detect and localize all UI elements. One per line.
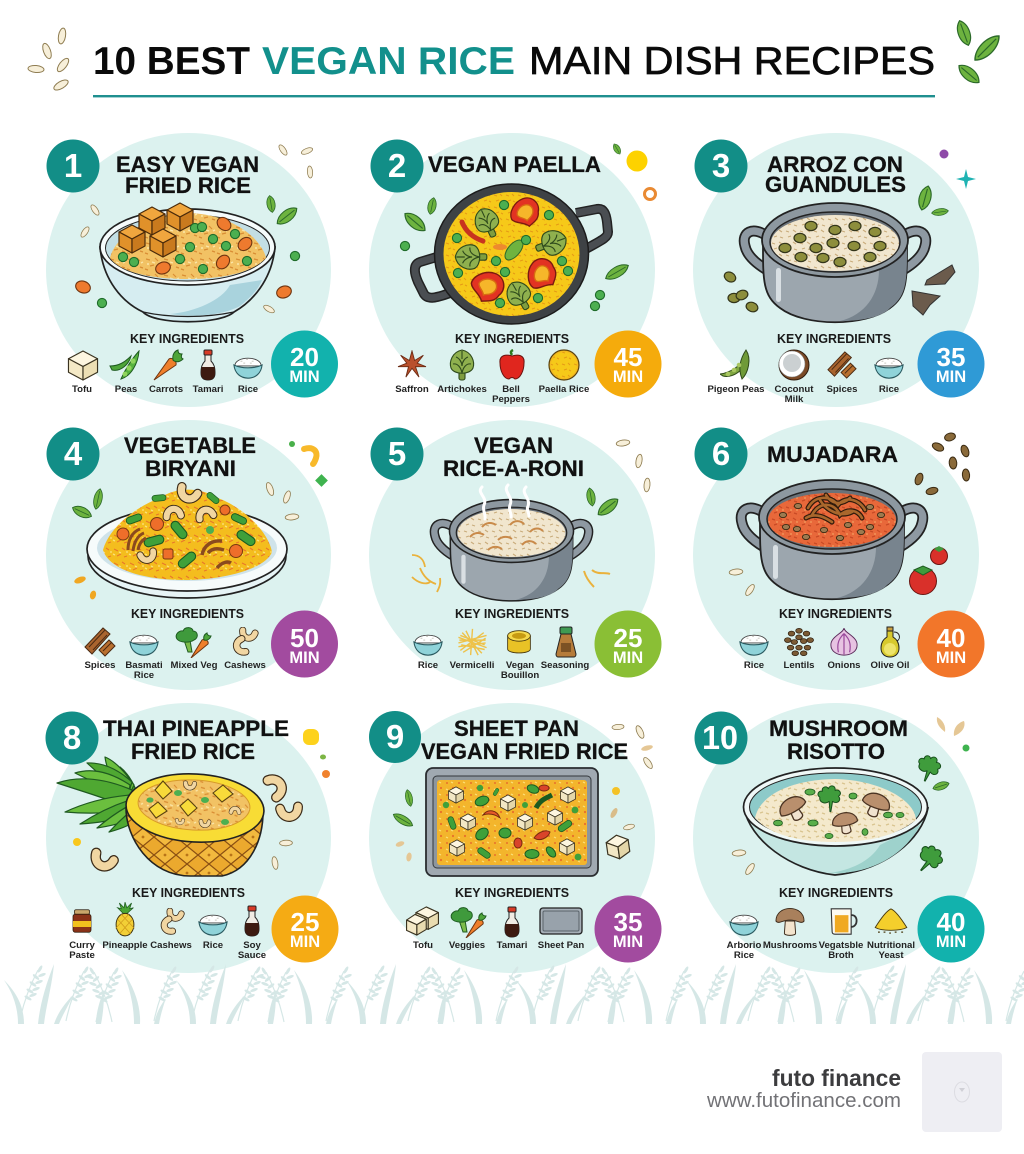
footer brand text: www.futofinance.com bbox=[706, 1090, 901, 1112]
ingredient: Bell Peppers: Peppers bbox=[492, 394, 530, 405]
ingredient: Spices bbox=[85, 628, 115, 671]
ingredient: Rice bbox=[234, 358, 262, 395]
time badge 40 min bbox=[918, 896, 984, 962]
time badge 25 min: MIN bbox=[613, 649, 643, 667]
key ingredients label: KEY INGREDIENTS bbox=[132, 886, 245, 900]
heading: FRIED RICE bbox=[131, 739, 255, 764]
time badge 45 min bbox=[594, 330, 662, 398]
key ingredients label: KEY INGREDIENTS bbox=[779, 607, 892, 621]
illustration: steaming pot bbox=[434, 485, 589, 601]
ingredient: Pineapple bbox=[102, 902, 148, 951]
number badge 9: 9 bbox=[386, 718, 404, 755]
decorative ingredients bbox=[400, 142, 656, 311]
ingredient: Rice bbox=[199, 915, 227, 951]
ingredient: Pigeon Peas bbox=[707, 350, 765, 395]
ingredient: Rice bbox=[414, 635, 442, 671]
ingredient: Coconut Milk bbox=[775, 350, 814, 405]
decorative ingredients bbox=[723, 150, 976, 315]
ingredient: Vermicelli bbox=[450, 629, 494, 671]
ingredient: Tofu bbox=[68, 351, 98, 395]
illustration: bowl of fried rice bbox=[100, 203, 275, 322]
ingredient: Vegan Bouillon bbox=[501, 631, 539, 681]
time badge 40 min bbox=[918, 610, 984, 678]
time badge 40 min: MIN bbox=[936, 933, 966, 951]
ingredient: Onions bbox=[827, 628, 861, 671]
time badge 45 min: MIN bbox=[613, 368, 643, 386]
time badge 20 min bbox=[271, 330, 338, 398]
ingredient: Soy Sauce: Soy bbox=[243, 940, 261, 951]
panel: 2 Vegan Paella bbox=[369, 133, 662, 407]
panel: 1 Easy Vegan Fried Rice bbox=[46, 133, 338, 407]
key ingredients label: KEY INGREDIENTS bbox=[131, 607, 244, 621]
decorative ingredients bbox=[71, 441, 328, 600]
panel: 8 Thai Pineapple Fried Rice bbox=[46, 703, 338, 973]
icon: rice grains top left bbox=[28, 28, 71, 92]
ingredient: Coconut Milk: Milk bbox=[785, 394, 804, 405]
time badge 45 min: 45 bbox=[614, 342, 642, 372]
title: VEGAN RICE bbox=[262, 40, 515, 83]
number badge 3 bbox=[694, 140, 748, 192]
ingredient: Mixed Veg: Mixed Veg bbox=[171, 660, 218, 671]
heading: SHEET PAN bbox=[454, 716, 579, 741]
ingredient: Cashews: Cashews bbox=[224, 660, 266, 671]
heading bbox=[769, 716, 908, 764]
time badge 35 min: 35 bbox=[614, 907, 642, 937]
ingredient: Olive Oil: Olive Oil bbox=[871, 660, 909, 671]
ingredient: Nutritional Yeast: Nutritional bbox=[867, 940, 915, 951]
ingredient: Tofu: Tofu bbox=[72, 384, 92, 395]
decorative ingredients bbox=[74, 144, 314, 314]
ingredient: Basmati Rice: Basmati bbox=[125, 660, 163, 671]
time badge 35 min: MIN bbox=[936, 368, 966, 386]
number badge 5: 5 bbox=[388, 435, 406, 472]
ingredient: Mushrooms: Mushrooms bbox=[763, 940, 817, 951]
ingredient: Onions: Onions bbox=[827, 660, 861, 671]
ingredient: Rice bbox=[740, 635, 768, 671]
ingredient: Spices bbox=[827, 352, 857, 395]
footer brand text bbox=[706, 1065, 901, 1112]
time badge 35 min bbox=[594, 896, 662, 962]
ingredient: Seasoning bbox=[541, 627, 589, 671]
ingredient: Soy Sauce: Sauce bbox=[238, 950, 266, 961]
ingredient: Tamari: Tamari bbox=[497, 940, 527, 951]
ingredient: Mixed Veg bbox=[171, 628, 218, 671]
footer brand text: futo finance bbox=[772, 1065, 901, 1091]
key ingredients label: KEY INGREDIENTS bbox=[455, 886, 569, 900]
heading bbox=[443, 433, 584, 481]
decorative ingredients bbox=[391, 724, 654, 862]
ingredient: Tofu bbox=[407, 907, 438, 951]
illustration: pineapple boat bbox=[57, 757, 266, 876]
heading: VEGAN FRIED RICE bbox=[421, 739, 628, 764]
ingredient: Pineapple: Pineapple bbox=[102, 940, 148, 951]
illustration: biryani on a plate bbox=[87, 487, 287, 598]
time badge 35 min: 35 bbox=[937, 342, 965, 372]
number badge 6: 6 bbox=[712, 435, 730, 472]
title: 10 BEST bbox=[93, 40, 250, 83]
ingredient: Pigeon Peas: Pigeon Peas bbox=[707, 384, 765, 395]
number badge 1 bbox=[46, 140, 100, 192]
footer logo tile bbox=[922, 1052, 1002, 1132]
decorative tomatoes and grains bbox=[729, 546, 948, 597]
illustration: sheet pan of fried rice bbox=[426, 768, 598, 876]
ingredient: Vegetable Broth bbox=[819, 909, 863, 961]
ingredient: Paella Rice bbox=[539, 350, 589, 395]
ingredient: Peas: Peas bbox=[115, 384, 137, 395]
illustration: pot with rice and pigeon peas bbox=[744, 203, 926, 322]
heading: THAI PINEAPPLE bbox=[103, 716, 289, 741]
heading: BIRYANI bbox=[145, 456, 236, 481]
ingredient: Rice: Rice bbox=[879, 384, 899, 395]
ingredient: Sheet Pan: Sheet Pan bbox=[538, 940, 584, 951]
decorative ingredients bbox=[732, 717, 970, 877]
heading: VEGAN bbox=[474, 433, 553, 458]
ingredient: Vegan Bouillon: Bouillon bbox=[501, 670, 539, 681]
ingredient: Vegetable Broth: Vegatsble bbox=[819, 940, 863, 951]
key ingredients label: KEY INGREDIENTS bbox=[130, 332, 244, 346]
time badge 35 min: MIN bbox=[613, 933, 643, 951]
heading bbox=[765, 152, 906, 197]
rice plant band bbox=[0, 964, 1024, 1064]
ingredient: Saffron: Saffron bbox=[395, 384, 429, 395]
number badge 8 bbox=[46, 712, 98, 764]
ingredient: Spices: Spices bbox=[85, 660, 115, 671]
number badge 8: 8 bbox=[63, 719, 81, 756]
heading: RICE-A-RONI bbox=[443, 456, 584, 481]
time badge 25 min bbox=[594, 610, 662, 678]
ingredient: Cashews bbox=[224, 630, 266, 671]
key ingredients label: KEY INGREDIENTS bbox=[777, 332, 891, 346]
heading bbox=[116, 152, 259, 198]
panel: 10 Mushroom Risotto bbox=[693, 703, 984, 973]
time badge 50 min bbox=[271, 610, 338, 678]
heading bbox=[124, 433, 256, 481]
ingredient: Soy Sauce bbox=[238, 906, 266, 961]
ingredient: Bell Peppers bbox=[492, 350, 530, 405]
number badge 10: 10 bbox=[702, 719, 738, 756]
number badge 2: 2 bbox=[388, 147, 406, 184]
number badge 5 bbox=[370, 428, 424, 480]
heading: EASY VEGAN bbox=[116, 152, 259, 177]
ingredient: Arborio Rice: Rice bbox=[734, 950, 754, 961]
ingredient: Basmati Rice: Rice bbox=[134, 670, 154, 681]
key ingredients label: KEY INGREDIENTS bbox=[779, 886, 893, 900]
ingredient: Spices: Spices bbox=[827, 384, 857, 395]
panel: 4 Vegetable Biryani bbox=[46, 420, 338, 690]
time badge 50 min: 50 bbox=[290, 623, 319, 653]
ingredient: Seasoning: Seasoning bbox=[541, 660, 589, 671]
ingredient: Saffron bbox=[395, 351, 429, 395]
time badge 20 min: MIN bbox=[289, 368, 320, 386]
key ingredients label: KEY INGREDIENTS bbox=[455, 332, 569, 346]
heading bbox=[103, 716, 289, 764]
number badge 4 bbox=[46, 428, 100, 480]
heading: VEGAN PAELLA bbox=[428, 152, 601, 177]
time badge 40 min: MIN bbox=[936, 649, 966, 667]
icon: leaves top right bbox=[954, 19, 1003, 87]
ingredient: Nutritional Yeast bbox=[867, 909, 915, 961]
number badge 10 bbox=[694, 712, 748, 764]
heading: MUJADARA bbox=[767, 442, 898, 467]
ingredient: Curry Paste bbox=[69, 910, 95, 961]
heading: VEGETABLE bbox=[124, 433, 256, 458]
number badge 9 bbox=[369, 711, 421, 763]
heading: MUSHROOM bbox=[769, 716, 908, 741]
number badge 6 bbox=[694, 428, 748, 480]
heading bbox=[421, 716, 628, 764]
title bbox=[93, 40, 935, 83]
ingredient: Cashews bbox=[150, 911, 192, 951]
ingredient: Lentils: Lentils bbox=[784, 660, 814, 671]
ingredient: Cashews: Cashews bbox=[150, 940, 192, 951]
panel: 5 Vegan Rice-A-Roni bbox=[369, 420, 662, 690]
ingredient: Nutritional Yeast: Yeast bbox=[878, 950, 904, 961]
ingredient: Paella Rice: Paella Rice bbox=[539, 384, 589, 395]
ingredient: Vegetable Broth: Broth bbox=[828, 950, 854, 961]
ingredient: Basmati Rice bbox=[125, 635, 163, 681]
heading: ARROZ CON bbox=[767, 152, 903, 177]
number badge 2 bbox=[370, 140, 424, 192]
number badge 1: 1 bbox=[64, 147, 82, 184]
ingredient: Curry Paste: Paste bbox=[69, 950, 95, 961]
ingredient: Arborio Rice bbox=[727, 915, 761, 961]
ingredient: Sheet Pan bbox=[538, 908, 584, 951]
heading: RISOTTO bbox=[787, 739, 885, 764]
ingredient: Coconut Milk: Coconut bbox=[775, 384, 814, 395]
ingredient: Artichokes: Artichokes bbox=[437, 384, 487, 395]
ingredient: Tamari: Tamari bbox=[193, 384, 223, 395]
time badge 50 min: MIN bbox=[289, 649, 320, 667]
ingredient: Rice: Rice bbox=[418, 660, 438, 671]
ingredient: Peas bbox=[110, 351, 139, 395]
time badge 25 min: 25 bbox=[291, 907, 319, 937]
ingredient: Veggies bbox=[449, 908, 486, 951]
key ingredients label: KEY INGREDIENTS bbox=[455, 607, 569, 621]
time badge 35 min bbox=[918, 330, 984, 398]
panel: 6 Mujadara bbox=[693, 420, 984, 690]
panel: 9 Sheet Pan Vegan Fried Rice bbox=[369, 703, 662, 973]
time badge 40 min: 40 bbox=[937, 907, 965, 937]
illustration: paella pan bbox=[415, 184, 608, 324]
heading: GUANDULES bbox=[765, 172, 906, 197]
ingredient: Tofu: Tofu bbox=[413, 940, 433, 951]
ingredient: Lentils bbox=[784, 628, 814, 671]
illustration: pot of mujadara bbox=[741, 480, 923, 599]
heading: FRIED RICE bbox=[125, 173, 251, 198]
decorative ingredients bbox=[412, 439, 651, 592]
ingredient: Veggies: Veggies bbox=[449, 940, 485, 951]
ingredient: Carrots bbox=[149, 350, 183, 395]
ingredient: Mushrooms bbox=[763, 908, 817, 951]
ingredient: Curry Paste: Curry bbox=[69, 940, 95, 951]
ingredient: Rice bbox=[875, 358, 903, 395]
ingredient: Rice: Rice bbox=[744, 660, 764, 671]
ingredient: Carrots: Carrots bbox=[149, 384, 183, 395]
title underline bbox=[93, 95, 935, 97]
ingredient: Vermicelli: Vermicelli bbox=[450, 660, 494, 671]
time badge 25 min: 25 bbox=[614, 623, 642, 653]
panel: 3 Arroz con Guandules bbox=[693, 133, 984, 407]
time badge 40 min: 40 bbox=[937, 623, 965, 653]
title: MAIN DISH RECIPES bbox=[529, 40, 935, 83]
decorative lentils bbox=[914, 432, 970, 496]
ingredient: Bell Peppers: Bell bbox=[502, 384, 520, 395]
ingredient: Olive Oil bbox=[871, 627, 909, 671]
ingredient: Tamari bbox=[193, 350, 223, 395]
time badge 25 min: MIN bbox=[290, 933, 320, 951]
ingredient: Arborio Rice: Arborio bbox=[727, 940, 761, 951]
ingredient: Vegan Bouillon: Vegan bbox=[506, 660, 534, 671]
time badge 25 min bbox=[272, 896, 338, 962]
decorative ingredients bbox=[73, 729, 330, 870]
number badge 3: 3 bbox=[712, 147, 730, 184]
ingredient: Artichokes bbox=[437, 350, 487, 395]
ingredient: Rice: Rice bbox=[203, 940, 223, 951]
ingredient: Rice: Rice bbox=[238, 384, 258, 395]
ingredient: Tamari bbox=[497, 907, 527, 951]
illustration: bowl of risotto bbox=[744, 768, 928, 875]
number badge 4: 4 bbox=[64, 435, 83, 472]
time badge 20 min: 20 bbox=[290, 342, 319, 372]
